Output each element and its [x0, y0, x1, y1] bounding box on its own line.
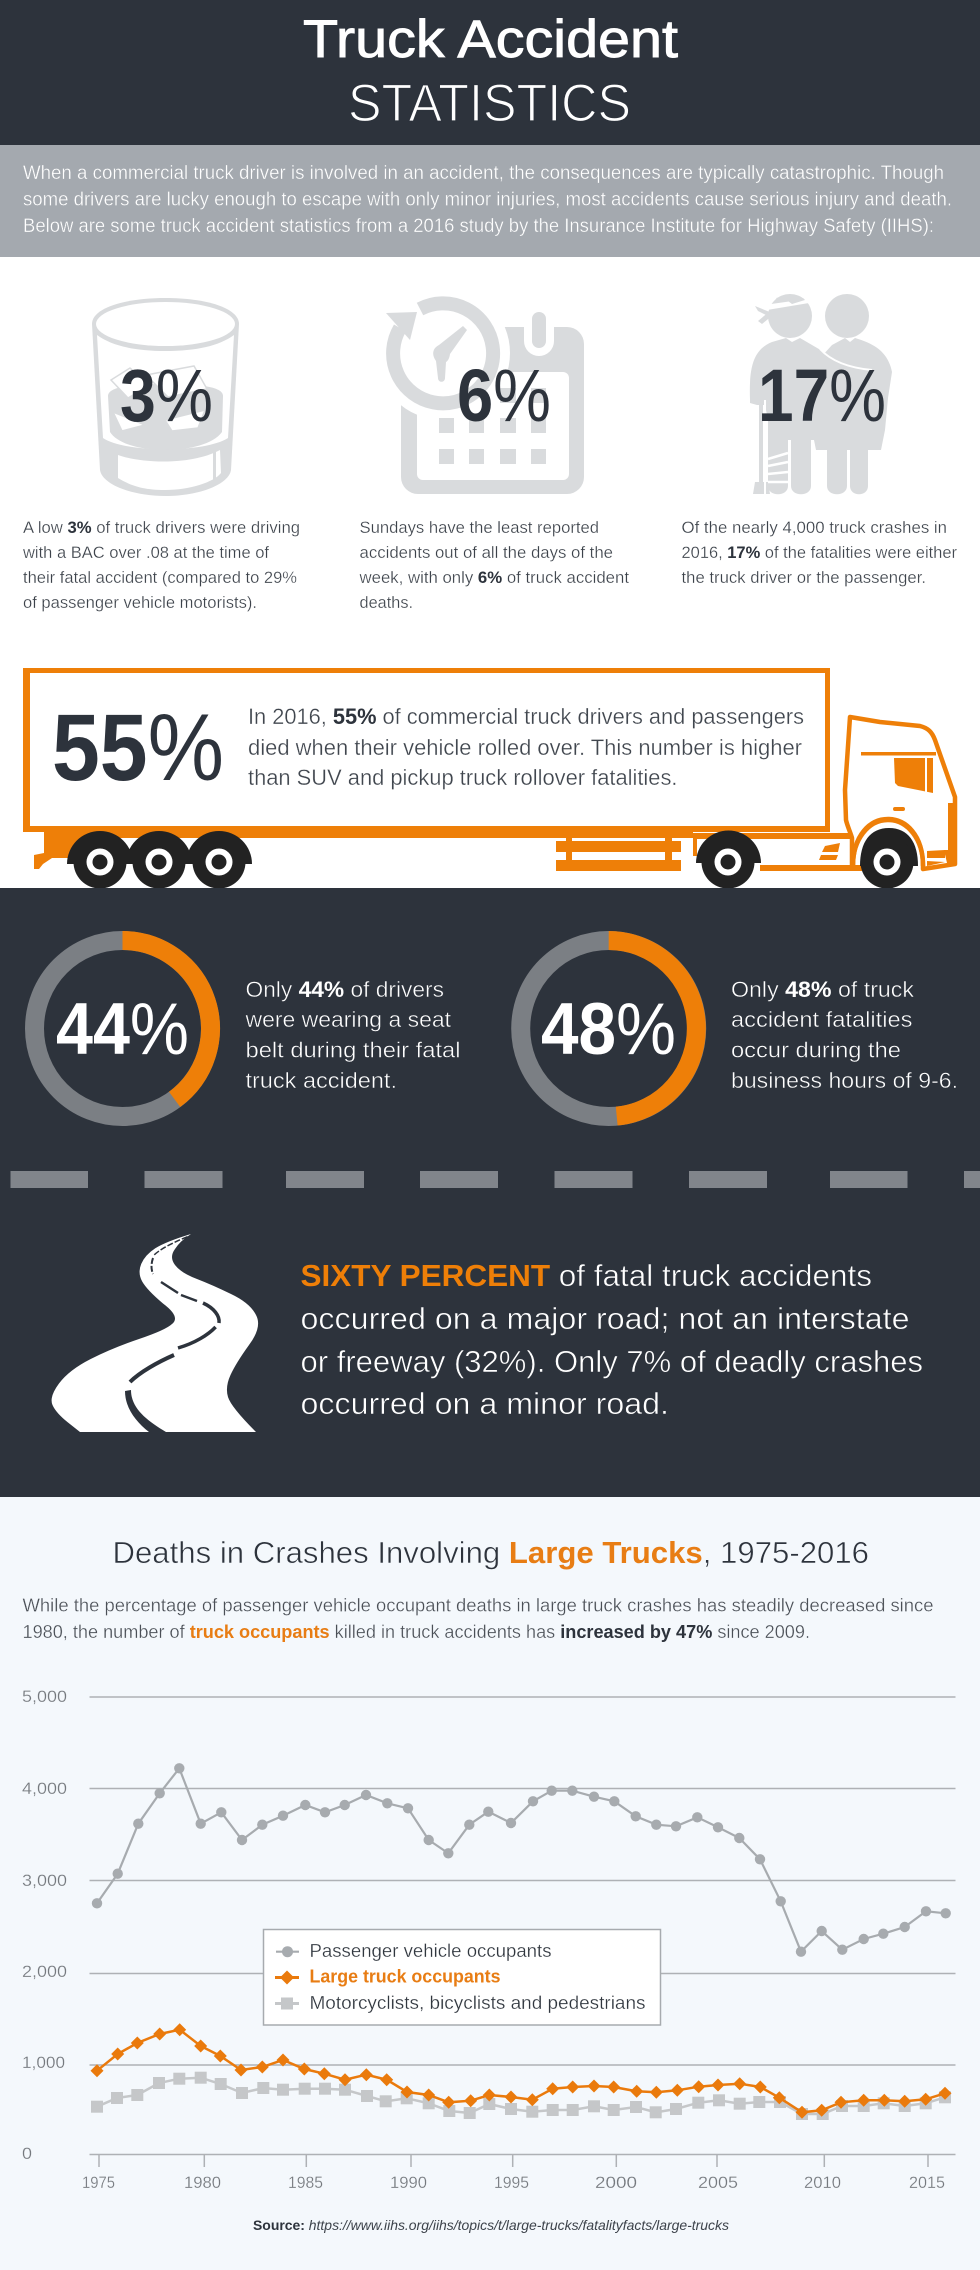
chart heading: Deaths in Crashes Involving Large Trucks, 1975-2016	[112, 1535, 869, 1570]
intro panel: some drivers are lucky enough to escape with only minor injuries, most accidents cause serious injury and death.	[23, 190, 952, 210]
text block: deaths.	[360, 594, 413, 612]
intro panel: Below are some truck accident statistics from a 2016 study by the Insurance Institute for Highway Safety (IIHS):	[23, 216, 934, 237]
icon: whiskey glass	[92, 298, 239, 496]
y axis labels	[22, 1687, 67, 2163]
text block: 48%: Only 48% of truck	[731, 977, 915, 1002]
text block: died when their vehicle rolled over. This number is higher	[248, 735, 802, 760]
text block: sixty percent: occurred on a minor road.	[300, 1386, 669, 1421]
y axis labels: 5,000	[22, 1687, 67, 1706]
donut chart: 48%	[521, 940, 697, 1116]
panel: 3 percent stat	[22, 298, 300, 612]
text block: In 2016, 55% of commercial truck drivers and passengers	[248, 704, 804, 729]
text block: week, with only 6% of truck accident	[358, 569, 629, 587]
text block: their fatal accident (compared to 29%	[23, 569, 297, 587]
x axis labels: 1995	[494, 2173, 529, 2192]
x axis labels: 1980	[184, 2173, 221, 2192]
text block: 44%: were wearing a seat	[244, 1007, 452, 1032]
stat: 55%: 55%	[52, 695, 224, 801]
x axis labels: 2010	[804, 2173, 841, 2192]
x axis labels: 1985	[288, 2173, 323, 2192]
y axis labels: 3,000	[22, 1871, 67, 1890]
donut chart: 44%	[34, 940, 210, 1116]
wheels	[67, 828, 918, 888]
icon: calendar and clock	[376, 286, 584, 494]
donut chart: 44%: 44%	[56, 989, 189, 1070]
x axis labels: 2005	[698, 2173, 738, 2192]
text block: with a BAC over .08 at the time of	[22, 544, 269, 562]
legend item: large truck occupants: Large truck occupants	[310, 1966, 500, 1986]
text block: of passenger vehicle motorists).	[23, 594, 257, 612]
text block	[22, 519, 300, 612]
text block: sixty percent: or freeway (32%). Only 7% of deadly crashes	[300, 1344, 923, 1379]
series: large truck occupants	[97, 2030, 945, 2112]
text block: 48%	[731, 977, 958, 1093]
source: Source: https://www.iihs.org/iihs/topics/t/large-trucks/fatalityfacts/large-trucks	[253, 2217, 729, 2233]
text block: 44%	[244, 977, 460, 1093]
x axis labels: 1975	[82, 2173, 115, 2192]
trailer box	[23, 668, 830, 838]
text block: 2016, 17% of the fatalities were either	[682, 544, 958, 562]
donut chart: 48%: 48%	[541, 989, 676, 1070]
y axis labels: 4,000	[22, 1779, 67, 1798]
trailer rear guard	[34, 832, 90, 869]
text block: sixty percent: SIXTY PERCENT of fatal truck accidents	[300, 1258, 872, 1293]
intro panel: When a commercial truck driver is involved in an accident, the consequences are typically catastrophic. Though	[23, 163, 944, 184]
text block: 48%: accident fatalities	[731, 1007, 912, 1032]
title: Truck Accident	[303, 10, 678, 69]
text block: Sundays have the least reported	[360, 519, 599, 537]
legend item: motorcyclists: Motorcyclists, bicyclists and pedestrians	[310, 1993, 646, 2013]
text block: 44%: truck accident.	[246, 1068, 397, 1093]
text block: 44%: Only 44% of drivers	[246, 977, 444, 1002]
panel: truck with 55 percent stat	[23, 668, 956, 888]
dark panel	[0, 888, 980, 1497]
chassis	[693, 833, 862, 871]
text block: Of the nearly 4,000 truck crashes in	[682, 519, 947, 537]
stat: 6%: 6%	[457, 354, 551, 437]
header panel	[0, 0, 980, 145]
text block: A low 3% of truck drivers were driving	[23, 519, 300, 537]
chart description: 1980, the number of truck occupants killed in truck accidents has increased by 47% since 2009.	[22, 1621, 810, 1642]
text block: the truck driver or the passenger.	[682, 569, 926, 587]
text block: accidents out of all the days of the	[360, 544, 613, 562]
chart description	[22, 1594, 934, 1642]
x axis labels: 2015	[909, 2173, 945, 2192]
panel: 17 percent stat	[682, 294, 958, 587]
icon: truck	[23, 668, 956, 888]
stat: 17%: 17%	[758, 354, 886, 437]
x axis labels: 1990	[390, 2173, 427, 2192]
y axis labels: 1,000	[22, 2053, 65, 2072]
text block: 48%: business hours of 9-6.	[731, 1068, 958, 1093]
chart panel	[0, 1497, 980, 2270]
x axis labels: 2000	[595, 2173, 637, 2192]
intro panel	[0, 145, 980, 257]
side rails	[556, 836, 681, 871]
series: motorcyclists, bicyclists and pedestrians	[97, 2078, 945, 2114]
line chart	[22, 1687, 956, 2192]
text block: sixty percent	[300, 1258, 923, 1421]
chart description: While the percentage of passenger vehicle occupant deaths in large truck crashes has steadily decreased since	[22, 1594, 934, 1616]
cab	[845, 717, 955, 869]
icon: winding road	[52, 1234, 258, 1432]
subtitle: STATISTICS	[348, 74, 631, 133]
legend item: passenger vehicle occupants: Passenger vehicle occupants	[310, 1941, 552, 1961]
text block	[358, 519, 629, 612]
series: passenger vehicle occupants	[97, 1768, 946, 1952]
text block	[248, 704, 804, 790]
panel: 6 percent stat	[358, 286, 629, 612]
text block: than SUV and pickup truck rollover fatalities.	[248, 765, 678, 790]
y axis labels: 0	[22, 2144, 32, 2163]
icon: injured couple	[750, 294, 892, 494]
text block: 48%: occur during the	[731, 1038, 901, 1062]
x axis labels	[82, 2173, 945, 2192]
text block	[682, 519, 958, 587]
text block: sixty percent: occurred on a major road; not an interstate	[300, 1301, 910, 1336]
text block: 44%: belt during their fatal	[246, 1038, 460, 1062]
stat: 3%: 3%	[120, 354, 213, 437]
y axis labels: 2,000	[22, 1962, 67, 1981]
legend	[264, 1930, 660, 2025]
